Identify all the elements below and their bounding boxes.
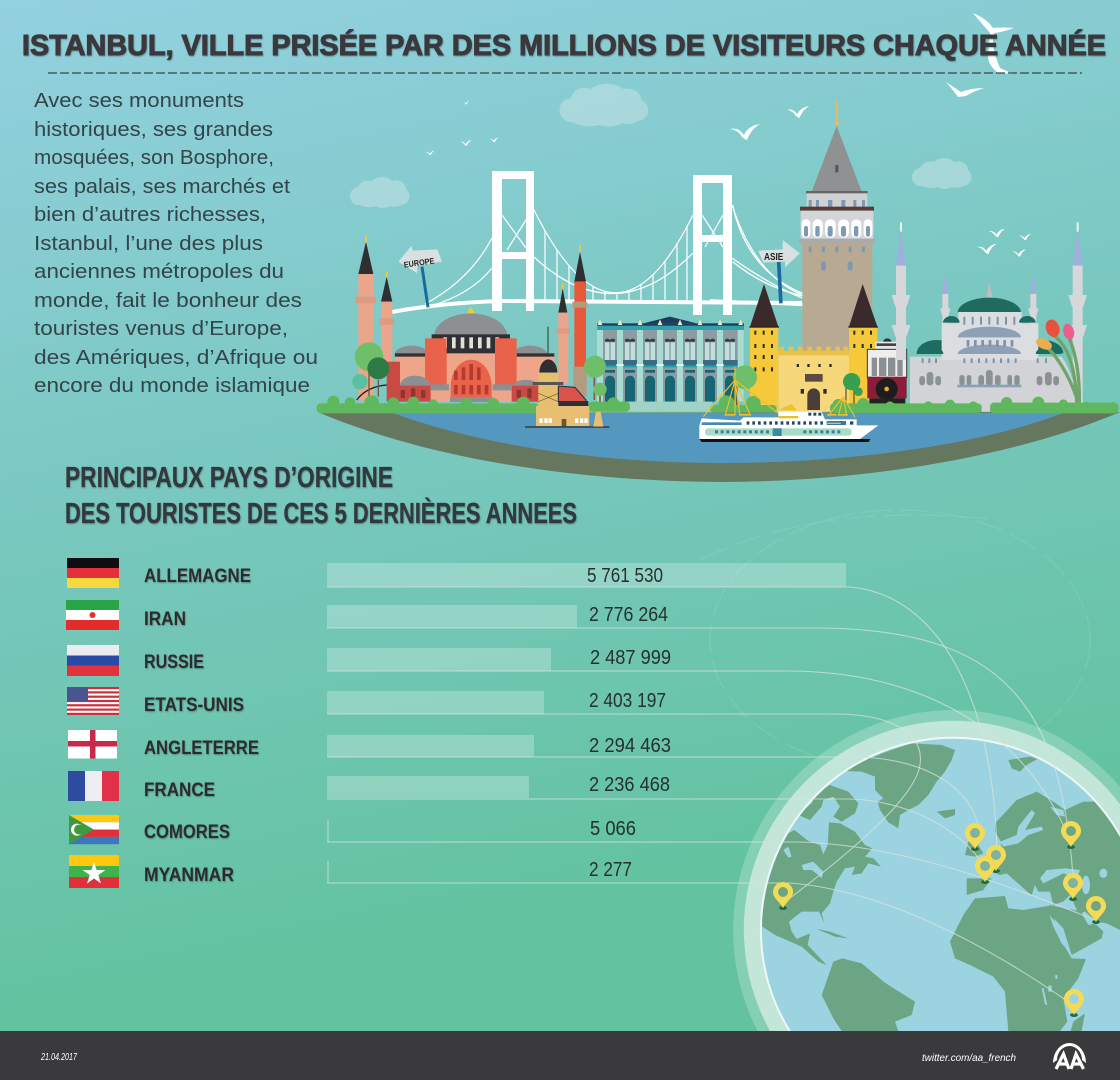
flag: Myanmar (69, 855, 119, 888)
intro text block: Avec ses monuments (34, 90, 244, 112)
map pins (773, 821, 1106, 1017)
flag: Russia (67, 645, 119, 676)
pin: UK (965, 823, 985, 849)
Europe sign: EUROPE (403, 255, 435, 270)
pin: Iran (1063, 873, 1083, 899)
globe with rings (733, 710, 1120, 1031)
Africa (950, 896, 1086, 1031)
route lines to the map pins (327, 587, 1095, 1005)
country labels: RUSSIE (144, 652, 204, 673)
value labels: 2 776 264 (589, 604, 668, 626)
Asie sign (758, 240, 800, 303)
flags (66, 558, 119, 888)
bar chart (144, 563, 1095, 1005)
country labels: IRAN (144, 609, 186, 630)
inland seas (1000, 807, 1107, 1005)
Caribbean (817, 929, 848, 938)
Blue mosque (892, 222, 1087, 412)
intro text block: des Amériques, d’Afrique ou (34, 347, 318, 369)
pin: France (975, 856, 995, 882)
domes and walls (357, 307, 554, 402)
value labels: 2 403 197 (589, 690, 666, 712)
intro text block (34, 90, 318, 397)
palace trees (584, 356, 630, 412)
flag: Iran (66, 600, 119, 630)
superstructure and hull (778, 404, 797, 411)
country labels: ANGLETERRE (144, 738, 259, 759)
intro text block: historiques, ses grandes (34, 119, 273, 141)
Galata tower (799, 100, 875, 356)
chart heading: DES TOURISTES DE CES 5 DERNIÈRES ANNEES (65, 496, 577, 530)
Arabia (1050, 905, 1103, 955)
country labels: ALLEMAGNE (144, 566, 251, 587)
Svalbard (1008, 757, 1037, 772)
Eurasia (987, 792, 1120, 930)
tram (867, 338, 907, 404)
faint background globe arcs (700, 510, 1090, 770)
intro text block: mosquées, son Bosphore, (34, 147, 274, 169)
value labels: 2 277 (589, 859, 632, 881)
tulips (1034, 318, 1079, 403)
continents, eastern half (950, 757, 1120, 1031)
Maiden's Tower (525, 327, 609, 428)
flag: France (68, 771, 119, 801)
value labels: 5 761 530 (587, 565, 663, 587)
pin: Germany (986, 845, 1006, 871)
illustration: Istanbul skyline (317, 100, 1120, 482)
yellow gate (749, 284, 878, 412)
Arctic islands (798, 785, 858, 822)
North America (755, 822, 881, 965)
pin: Myanmar (1086, 896, 1106, 922)
masts (703, 367, 855, 417)
bridge (392, 171, 802, 315)
country labels: FRANCE (144, 780, 215, 801)
main title: ISTANBUL, VILLE PRISÉE PAR DES MILLIONS DE VISITEURS CHAQUE ANNÉE (22, 28, 1106, 62)
date: 21.04.2017 (40, 1052, 77, 1063)
intro text block: encore du monde islamique (34, 375, 310, 397)
value labels (587, 565, 671, 881)
ferry boat (699, 367, 878, 442)
intro text block: monde, fait le bonheur des (34, 290, 302, 312)
value labels: 2 236 468 (589, 774, 670, 796)
Iberia, Britain, Madagascar (965, 842, 1085, 1031)
country labels: COMORES (144, 822, 230, 843)
intro text block: anciennes métropoles du (34, 261, 284, 283)
chart heading: PRINCIPAUX PAYS D’ORIGINE (65, 462, 393, 494)
continents, western half (755, 743, 1120, 1031)
sky: clouds (350, 84, 972, 208)
Dolmabahce palace (584, 317, 744, 412)
bushes strip (317, 395, 538, 413)
chart heading (65, 462, 577, 530)
flag: USA (67, 687, 119, 715)
bars (327, 563, 846, 883)
intro text block: touristes venus d’Europe, (34, 318, 288, 340)
footer bar (0, 1031, 1120, 1080)
twitter handle: twitter.com/aa_french (922, 1052, 1016, 1064)
Europe sign (398, 246, 442, 307)
country labels (144, 566, 259, 886)
Iceland (937, 809, 955, 818)
intro text block: Istanbul, l’une des plus (34, 233, 263, 255)
Hagia Sophia (317, 236, 587, 413)
minarets (356, 236, 587, 401)
island ground (320, 412, 1120, 482)
value labels: 5 066 (590, 818, 636, 840)
small trees by gate (733, 365, 863, 407)
intro text block: bien d’autres richesses, (34, 204, 266, 226)
bridge end over tower (733, 205, 802, 296)
pin: Russia (1061, 821, 1081, 847)
flag: England (68, 730, 117, 758)
icon: AA logo (1053, 1043, 1086, 1069)
pin: USA (773, 882, 793, 908)
Asie sign: ASIE (764, 252, 784, 263)
Greenland (844, 743, 955, 828)
value labels: 2 294 463 (589, 735, 671, 757)
South America (822, 958, 915, 1031)
pin: Comoros (1064, 989, 1084, 1015)
bushes right (710, 395, 1118, 413)
sky: small seagulls (426, 101, 1031, 257)
Galata tower, gate, tram, mosque (710, 100, 1118, 413)
value labels: 2 487 999 (590, 647, 671, 669)
dashed title rule (48, 72, 1082, 74)
country labels: MYANMAR (144, 865, 234, 886)
flag: Comoros (69, 815, 119, 844)
seagulls behind title (946, 13, 1014, 97)
trees (352, 342, 389, 398)
intro text block: ses palais, ses marchés et (34, 176, 290, 198)
flag: Germany (67, 558, 119, 588)
country labels: ETATS-UNIS (144, 695, 244, 716)
